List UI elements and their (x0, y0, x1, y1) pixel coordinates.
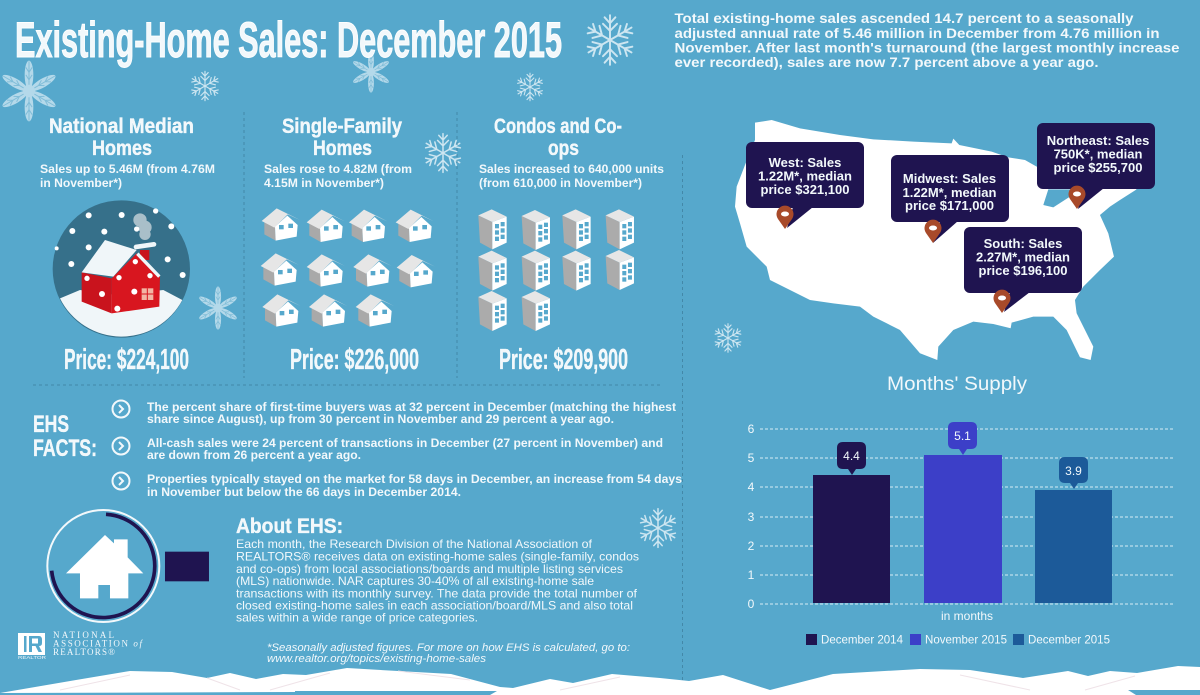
snowflake decorations (1, 15, 742, 547)
text: first-time buyers: The percent share of first-time buyers was at 32 percent in December (matching the highest (147, 402, 676, 414)
heading: condos and co-ops (494, 115, 622, 160)
logo: National Association of Realtors: NATIONAL (53, 630, 114, 640)
bar: December 2015: 3.9 (1065, 464, 1082, 478)
text: all-cash sales: are down from 26 percent a year ago. (147, 450, 361, 462)
grid lines (760, 429, 1175, 604)
heading: condos and co-ops: ops (548, 137, 579, 160)
callout: West: 1.22M*, median (758, 168, 852, 184)
callout: South: South: Sales (984, 236, 1062, 251)
panel: about EHS (236, 515, 639, 665)
heading: single-family homes (282, 115, 402, 160)
callout: Northeast (1037, 123, 1155, 209)
legend: December 2015 (1028, 632, 1110, 646)
intro text block: Total existing-home sales ascended 14.7 percent to a seasonally (674, 10, 1134, 26)
bar: December 2014: 4.4 (843, 449, 860, 463)
footnote: www.realtor.org/topics/existing-home-sales (267, 653, 487, 665)
text: condo sales (479, 162, 664, 190)
legend: November 2015 (925, 632, 1007, 646)
y axis labels: 1 (748, 568, 755, 582)
callout: Midwest (891, 155, 1009, 243)
icon: snow globe red house (53, 200, 190, 338)
logo: National Association of Realtors (18, 630, 143, 660)
panel: EHS facts (33, 400, 682, 499)
axis label: in months (941, 609, 993, 623)
heading: EHS facts: EHS (33, 411, 69, 438)
price: condos: Price: $209,900 (499, 344, 628, 376)
icon: magnifier with house (47, 510, 209, 622)
text: about EHS paragraph (236, 537, 639, 624)
text: national sales (40, 162, 215, 190)
heading: single-family homes: Single-Family (282, 115, 402, 138)
heading: condos and co-ops: Condos and Co- (494, 115, 622, 138)
logo: National Association of Realtors: ASSOCIATION of (53, 638, 143, 648)
callout: South (964, 227, 1082, 313)
logo: National Association of Realtors: REALTORS® (53, 647, 115, 657)
callout: Midwest: price $171,000 (905, 198, 994, 213)
text: national sales: Sales up to 5.46M (from 4.76M (40, 162, 215, 176)
bar: December 2015 (1035, 457, 1112, 603)
text: single-family sales: 4.15M in November*) (264, 176, 384, 190)
panel: condos and co-ops (478, 115, 664, 376)
text: about EHS paragraph: Each month, the Research Division of the National Association of (236, 537, 593, 551)
y axis labels: 5 (748, 451, 755, 465)
text: about EHS paragraph: closed existing-home sales in each association/board/MLS and also total (236, 598, 633, 612)
callout: West (746, 142, 864, 229)
bar: November 2015 (924, 422, 1002, 603)
text: about EHS paragraph: and co-ops) from local associations/boards and multiple listing services (236, 562, 623, 576)
callout: West: price $321,100 (761, 182, 849, 197)
y axis labels: 4 (748, 480, 755, 494)
callout: Midwest: 1.22M*, median (903, 185, 997, 200)
text: about EHS paragraph: REALTORS® receives data on existing-home sales (single-family, condos (236, 550, 639, 564)
text: days on market: in November but below the 66 days in December 2014. (147, 487, 461, 499)
text: about EHS paragraph: transactions with its monthly survey. The data provide the total number of (236, 586, 638, 600)
intro text block: adjusted annual rate of 5.46 million in December from 4.76 million in (674, 25, 1160, 41)
title: Existing-Home Sales: December 2015 (15, 12, 562, 68)
chart: months' supply (748, 374, 1175, 646)
text: national sales: in November*) (40, 176, 122, 190)
callout: South: 2.27M*, median (976, 250, 1070, 264)
intro text block (674, 10, 1180, 70)
footnote: *Seasonally adjusted figures. For more on how EHS is calculated, go to: (267, 642, 630, 654)
text: single-family sales: Sales rose to 4.82M (from (264, 162, 412, 176)
heading: national median homes: National Median (49, 115, 194, 138)
text: first-time buyers: share since August), up from 30 percent in November and 29 percent a year ago. (147, 414, 614, 426)
map outline (735, 120, 1137, 360)
text: about EHS paragraph: sales within a wide range of price categories. (236, 610, 478, 624)
chart title: Months' Supply (887, 374, 1028, 395)
logo: National Association of Realtors: REALTOR (18, 655, 47, 660)
text: days on market (147, 474, 682, 499)
price: national: Price: $224,100 (64, 344, 189, 376)
callout: West: West: Sales (769, 155, 841, 170)
bar: November 2015: 5.1 (954, 429, 971, 443)
y axis labels: 3 (748, 510, 755, 524)
icons: ten condo buildings (478, 209, 634, 331)
panel: single-family homes (261, 115, 435, 376)
callout: Northeast: 750K*, median (1054, 146, 1142, 162)
legend: December 2014 (821, 632, 903, 646)
map: United States with regional callouts (735, 120, 1155, 360)
text: days on market: Properties typically stayed on the market for 58 days in December, an increase from 54 days (147, 474, 682, 486)
intro text block: ever recorded), sales are now 7.7 percent above a year ago. (674, 54, 1098, 70)
text: about EHS paragraph: (MLS) nationwide. NAR captures 30-40% of all existing-home sale (236, 574, 594, 588)
heading: EHS facts: FACTS: (33, 435, 97, 462)
icons: eleven houses (261, 208, 435, 327)
callout: Northeast: price $255,700 (1054, 160, 1142, 175)
intro text block: November. After last month's turnaround (the largest monthly increase (674, 40, 1180, 56)
text: first-time buyers (147, 402, 676, 426)
text: condo sales: (from 610,000 in November*) (479, 176, 642, 190)
panel: national median homes (40, 115, 215, 376)
y axis labels: 6 (748, 422, 755, 436)
y axis labels: 0 (748, 597, 755, 611)
text: all-cash sales (147, 438, 663, 462)
text: all-cash sales: All-cash sales were 24 percent of transactions in December (27 percent in November) and (147, 438, 663, 450)
snowy mountains footer (0, 666, 1200, 695)
heading: about EHS: About EHS: (236, 515, 343, 538)
callout: Midwest: Midwest: Sales (903, 171, 996, 186)
callout: Northeast: Northeast: Sales (1047, 133, 1149, 148)
heading: national median homes: Homes (92, 137, 152, 160)
text: single-family sales (264, 162, 412, 190)
y axis labels: 2 (748, 539, 755, 553)
legend (806, 632, 1110, 646)
price: single-family: Price: $226,000 (290, 344, 419, 376)
callout: South: price $196,100 (979, 263, 1067, 278)
icons: bullet arrows (112, 400, 130, 490)
bar: December 2014 (813, 442, 890, 603)
heading: single-family homes: Homes (313, 137, 372, 160)
heading: national median homes (49, 115, 194, 160)
text: condo sales: Sales increased to 640,000 units (479, 162, 664, 176)
heading: EHS facts (33, 411, 97, 462)
y axis labels (748, 422, 755, 611)
column dividers (33, 112, 682, 680)
footnote (267, 642, 630, 665)
